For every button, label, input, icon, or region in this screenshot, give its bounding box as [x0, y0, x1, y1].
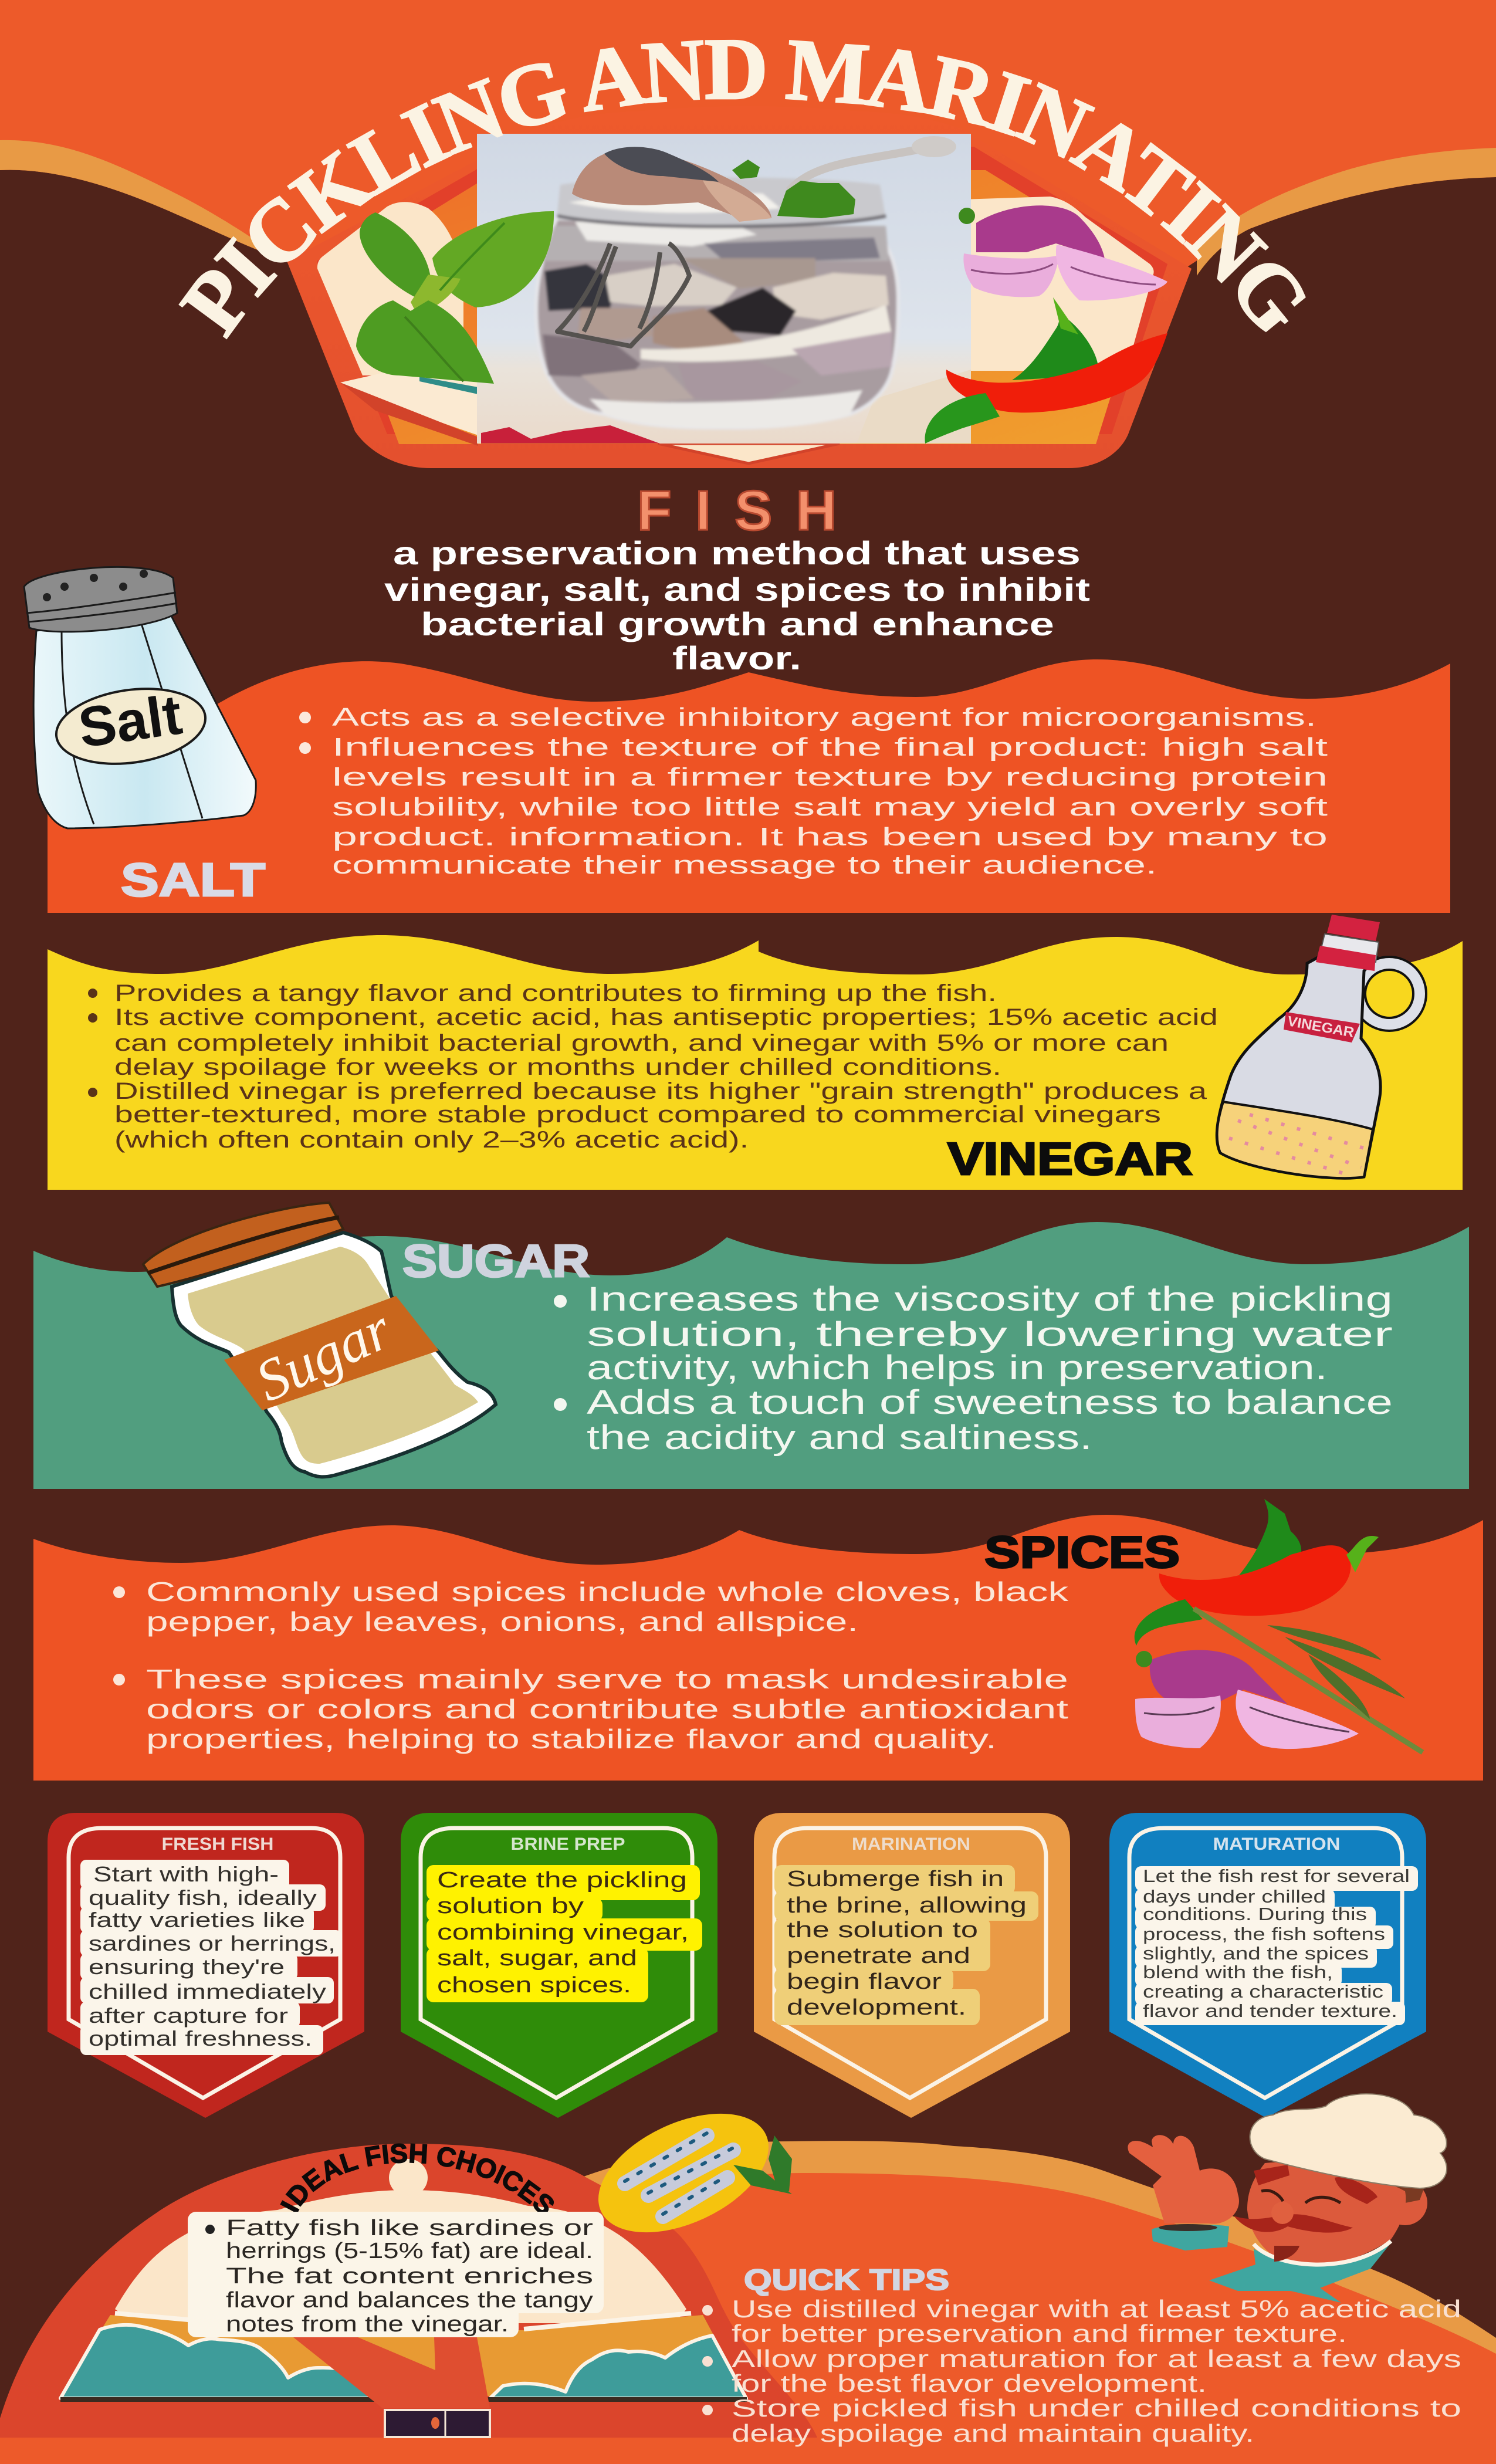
text block [1135, 1866, 1418, 2025]
spices panel background [33, 1515, 1483, 1781]
text block [427, 1865, 702, 2002]
jar clasp [557, 243, 689, 346]
heading: FRESH FISH [162, 1835, 273, 1854]
text block: ensuring they're [89, 1955, 285, 1979]
panel: salt [24, 567, 1450, 913]
heading: FISH: FISH [637, 479, 851, 542]
vinegar text: (which often contain only 2–3% acetic acid). [114, 1127, 749, 1153]
step card: brine prep [401, 1813, 717, 2118]
bottom wave: orange fill [587, 2173, 1496, 2464]
illustration: chili peppers [925, 297, 1167, 444]
quick tips list [702, 2295, 1461, 2447]
cloche handle [389, 2159, 428, 2196]
face [1247, 2162, 1406, 2266]
illustration: spices group [1135, 1499, 1423, 1752]
text block: chilled immediately [89, 1979, 326, 2003]
teal waves right [490, 2336, 746, 2398]
subtitle: definition of pickling: a preservation method that uses [393, 534, 1081, 571]
text block: creating a characteristic [1143, 1981, 1383, 2002]
collar line [1254, 2241, 1391, 2265]
text block: conditions. During this [1143, 1904, 1367, 1924]
sardines [625, 2133, 733, 2216]
nose [1271, 2202, 1294, 2224]
hair [1382, 2185, 1424, 2206]
text block: begin flavor [787, 1969, 942, 1994]
text block: days under chilled [1143, 1886, 1326, 1907]
text box: herrings (5-15% fat) are ideal. [226, 2239, 593, 2263]
salt bullets: solubility, while too little salt may yield an overly soft [332, 793, 1328, 821]
teal waves left [60, 2325, 377, 2398]
text block: Create the pickling [437, 1868, 687, 1893]
spices text: Commonly used spices include whole cloves, black [146, 1576, 1069, 1607]
sugar label script: Sugar [246, 1295, 401, 1414]
spoon [789, 147, 933, 191]
green tail [1135, 1599, 1203, 1646]
heading: MATURATION [1213, 1835, 1340, 1854]
vinegar text: delay spoilage for weeks or months under chilled conditions. [114, 1054, 1001, 1080]
wave band: left [0, 140, 287, 261]
panel: sugar [33, 1203, 1469, 1489]
quick tips list: for better preservation and firmer texture. [732, 2320, 1347, 2347]
spices text [113, 1576, 1069, 1754]
vinegar text: Distilled vinegar is preferred because its higher "grain strength" produces a [114, 1078, 1207, 1104]
arc heading: IDEAL FISH CHOICES [280, 2144, 554, 2212]
red arch [0, 2144, 817, 2438]
orange plate band [60, 2315, 746, 2396]
quick tips list: Store pickled fish under chilled conditions to [732, 2394, 1461, 2422]
text box [188, 2212, 604, 2337]
salt bullets [299, 703, 1328, 879]
spices heading: SPICES [984, 1528, 1180, 1578]
cream left panel [317, 202, 463, 375]
frame inner orange [334, 170, 1150, 444]
text block: chosen spices. [437, 1973, 631, 1998]
sugar text: the acidity and saltiness. [587, 1419, 1092, 1457]
onion [1150, 1650, 1288, 1704]
shaker label [52, 680, 210, 773]
sugar text: activity, which helps in preservation. [587, 1349, 1328, 1387]
cuff [1152, 2225, 1229, 2250]
text box: The fat content enriches [226, 2264, 593, 2289]
label [1284, 1012, 1360, 1043]
heading: MARINATION [852, 1835, 970, 1854]
spices text: pepper, bay leaves, onions, and allspice. [146, 1606, 858, 1637]
caps [1327, 915, 1380, 941]
salt bullets: levels result in a firmer texture by reducing protein [332, 763, 1328, 791]
jar contents [536, 177, 898, 428]
dark door [385, 2410, 490, 2437]
icon: vinegar bottle [1217, 915, 1420, 1178]
handle [1359, 963, 1420, 1024]
table items [481, 425, 660, 444]
photo: pickled fish jar [477, 134, 971, 444]
salt panel background [48, 659, 1450, 913]
herb sprig [1194, 1609, 1423, 1752]
sugar text: Adds a touch of sweetness to balance [587, 1383, 1393, 1421]
subtitle: definition of pickling: vinegar, salt, and spices to inhibit [384, 571, 1090, 608]
vinegar heading: VINEGAR [947, 1133, 1193, 1184]
wave band: right [1197, 148, 1496, 276]
bottle body [1217, 950, 1380, 1178]
emblem: pentagon frame with produce and jar photo [287, 106, 1192, 468]
illustration: chef [1128, 2094, 1447, 2303]
goatee [1274, 2246, 1299, 2262]
liquid [1217, 1102, 1373, 1178]
left table card [340, 367, 478, 435]
panel: spices [33, 1499, 1483, 1781]
bottom strip [0, 2438, 1496, 2464]
text block: salt, sugar, and [437, 1946, 637, 1971]
frame red band [317, 147, 1167, 434]
cream bottom chevron [658, 444, 840, 463]
quick tips heading: QUICK TIPS [744, 2263, 949, 2296]
text block: process, the fish softens [1143, 1924, 1385, 1944]
sugar text: solution, thereby lowering water [587, 1315, 1393, 1353]
subtitle: definition of pickling: flavor. [672, 639, 801, 676]
text block: solution by [437, 1894, 584, 1918]
jar rim [557, 177, 886, 227]
green chili [1223, 1499, 1301, 1593]
vinegar text: Its active component, acetic acid, has antiseptic properties; 15% acetic acid [114, 1004, 1218, 1030]
step card: marination [754, 1813, 1070, 2118]
scarf [1209, 2243, 1391, 2303]
quick tips list: Allow proper maturation for at least a few days [732, 2345, 1461, 2372]
salt bullets: Influences the texture of the final product: high salt [332, 733, 1328, 761]
text block: the brine, allowing [787, 1893, 1027, 1918]
quick tips list: delay spoilage and maintain quality. [732, 2419, 1254, 2447]
hand [1128, 2135, 1239, 2224]
bottom wave: light orange band [573, 2141, 1496, 2464]
illustration: onion [959, 205, 1167, 300]
vinegar panel background [48, 935, 1463, 1190]
icon: vinegar bottle: VINEGAR [1286, 1013, 1355, 1041]
sugar heading: SUGAR [402, 1235, 590, 1287]
text block: the solution to [787, 1918, 978, 1942]
red tie [293, 2337, 490, 2408]
text block: Let the fish rest for several [1143, 1866, 1410, 1886]
title: pickling and marinating: PICKLING AND MARINATING [178, 40, 1306, 339]
subtitle: definition of pickling [384, 534, 1090, 676]
quick tips list: for the best flavor development. [732, 2370, 1207, 2397]
red chili [1159, 1545, 1351, 1616]
photo backdrop [477, 134, 971, 444]
spices text: properties, helping to stabilize flavor and quality. [146, 1724, 997, 1754]
text block: development. [787, 1995, 966, 2020]
salt heading: SALT [121, 854, 265, 906]
fish on spoon [572, 150, 771, 218]
text box: flavor and balances the tangy [226, 2288, 593, 2313]
step card: fresh fish [48, 1813, 364, 2118]
section: ideal fish choices dome [0, 2144, 817, 2438]
text block: flavor and tender texture. [1143, 2001, 1397, 2021]
sugar panel background [33, 1222, 1469, 1489]
plate white stripe [115, 2313, 691, 2329]
cream right panel [962, 197, 1154, 371]
quick tips list: Use distilled vinegar with at least 5% acetic acid [732, 2295, 1461, 2323]
ear [1383, 2181, 1427, 2225]
text block: after capture for [89, 2003, 288, 2028]
step card: maturation [1109, 1813, 1426, 2118]
text block: Start with high- [93, 1862, 279, 1886]
text block: fatty varieties like [89, 1908, 305, 1932]
text block: penetrate and [787, 1944, 970, 1968]
dark plate edge [60, 2397, 747, 2402]
orange triangle [358, 2337, 435, 2370]
subtitle: definition of pickling: bacterial growth and enhance [421, 605, 1054, 642]
text block: combining vinegar, [437, 1920, 689, 1945]
liquid dots [1229, 1115, 1370, 1173]
vinegar text: can completely inhibit bacterial growth, and vinegar with 5% or more can [114, 1030, 1169, 1056]
text block: quality fish, ideally [89, 1886, 317, 1910]
sugar text: Increases the viscosity of the pickling [587, 1280, 1393, 1318]
eyes [1261, 2191, 1341, 2203]
illustration: basil [356, 211, 554, 384]
text block: slightly, and the spices [1143, 1943, 1369, 1964]
sugar text [554, 1280, 1393, 1457]
cloche [115, 2190, 686, 2323]
vinegar text: better-textured, more stable product compared to commercial vinegars [114, 1102, 1161, 1128]
text block: Submerge fish in [787, 1867, 1004, 1891]
salt bullets: product. information. It has been used by many to [332, 823, 1328, 851]
icon: salt shaker: Salt [75, 683, 185, 760]
text block: sardines or herrings, [89, 1931, 336, 1955]
text block [80, 1860, 342, 2055]
leaves [733, 2135, 792, 2194]
panel: vinegar [48, 915, 1463, 1190]
text block [774, 1865, 1038, 2025]
mustache [1234, 2214, 1353, 2233]
background: orange header with wave [0, 0, 1496, 364]
icon: salt shaker [24, 567, 256, 828]
heading: BRINE PREP [510, 1835, 625, 1854]
vinegar text [88, 980, 1218, 1153]
salt bullets: Acts as a selective inhibitory agent for microorganisms. [332, 703, 1316, 732]
text block: optimal freshness. [89, 2026, 312, 2050]
frame outer [287, 106, 1192, 468]
salt bullets: communicate their message to their audience. [332, 851, 1157, 879]
parsley [777, 181, 855, 218]
hat [1250, 2094, 1447, 2188]
spices text: odors or colors and contribute subtle antioxidant [146, 1694, 1068, 1724]
icon: plate of sardines [580, 2089, 792, 2257]
icon: sugar jar [143, 1203, 496, 1477]
brows [1254, 2165, 1377, 2204]
text block: blend with the fish, [1143, 1962, 1333, 1982]
text box: Fatty fish like sardines or [226, 2216, 594, 2240]
spices text: These spices mainly serve to mask undesirable [146, 1664, 1068, 1694]
vinegar text: Provides a tangy flavor and contributes to firming up the fish. [114, 980, 997, 1006]
text box: notes from the vinegar. [226, 2312, 509, 2337]
